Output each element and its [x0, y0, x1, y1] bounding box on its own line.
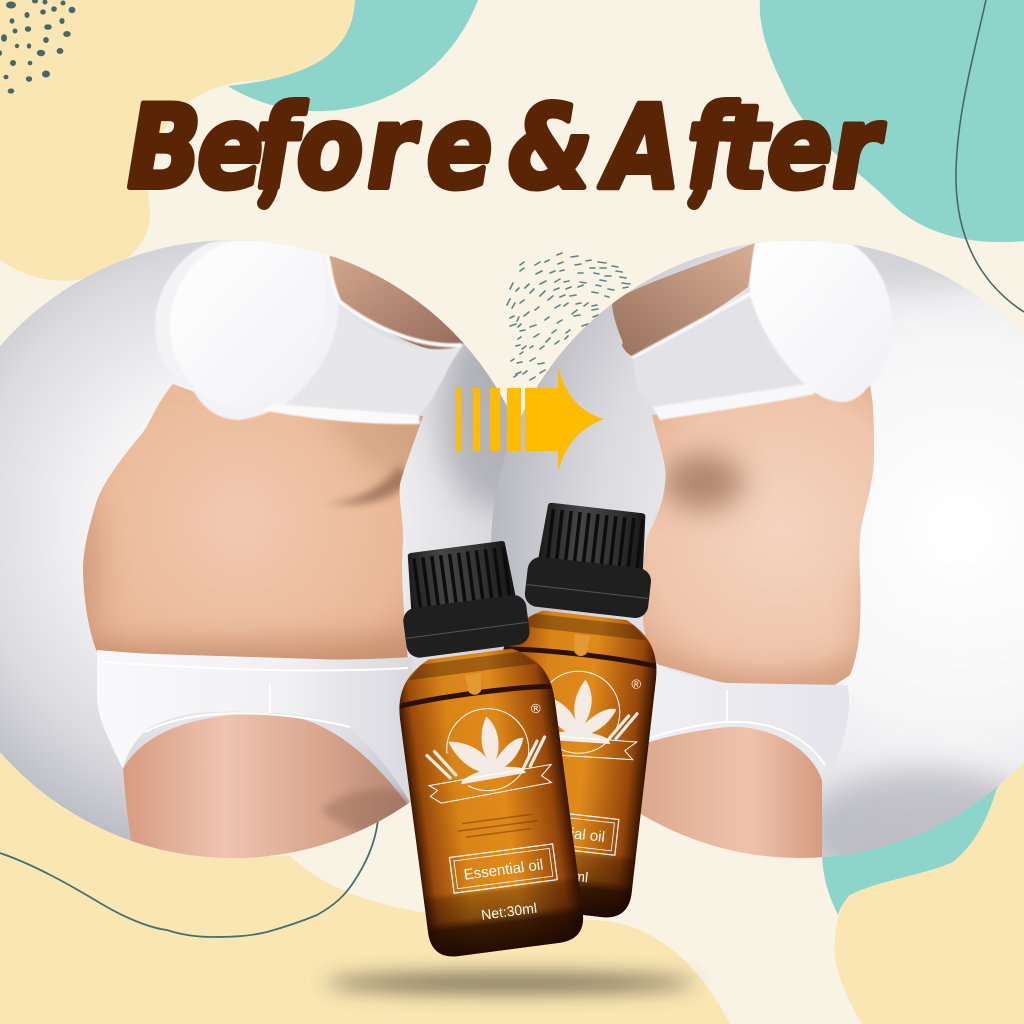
title descenders — [264, 180, 702, 203]
bottle cap — [403, 540, 517, 615]
thigh — [640, 727, 822, 858]
blob: bottom-left yellow — [0, 750, 730, 1024]
torso — [642, 385, 874, 685]
blob: bottom-right teal — [822, 770, 1000, 915]
line: bottom-left curve — [0, 820, 378, 937]
panties seam — [144, 664, 408, 733]
ground shadow — [325, 974, 695, 992]
bottle: front — [399, 541, 584, 956]
bottle glass — [474, 606, 662, 920]
decorative dashes: above arrow — [507, 253, 630, 380]
panties — [97, 650, 412, 806]
back skin above bra — [612, 243, 755, 357]
line: top-right curve — [956, 0, 1024, 312]
bra — [155, 239, 462, 424]
blob: top-left yellow — [0, 0, 355, 281]
photo: before body — [0, 239, 550, 860]
bottle label: Net:30ml — [532, 863, 589, 885]
bottle: rear — [503, 502, 656, 918]
bottle label: ® — [631, 676, 642, 692]
bottle label — [420, 700, 571, 927]
panties — [648, 664, 849, 750]
arrow — [456, 366, 604, 472]
blob: top-right teal — [760, 0, 1024, 242]
photo: after body — [480, 230, 1024, 890]
bottle label: ® — [530, 700, 542, 717]
blob: top-centre teal — [228, 0, 478, 111]
thigh — [123, 713, 412, 860]
torso — [83, 384, 423, 660]
bottle label: Essential oil — [463, 856, 544, 884]
bra — [632, 240, 892, 420]
panties seam — [650, 690, 825, 765]
title: Before & After — [128, 81, 885, 214]
bottle label: Net:30ml — [480, 900, 538, 923]
blob: bottom-right yellow — [835, 763, 1024, 1024]
bottle label — [497, 663, 644, 889]
bottle glass — [393, 644, 586, 960]
bottle cap — [537, 502, 650, 576]
back skin above bra — [327, 255, 465, 353]
decorative dots: top-left — [0, 0, 75, 94]
bottle label: Essential oil — [524, 820, 606, 846]
